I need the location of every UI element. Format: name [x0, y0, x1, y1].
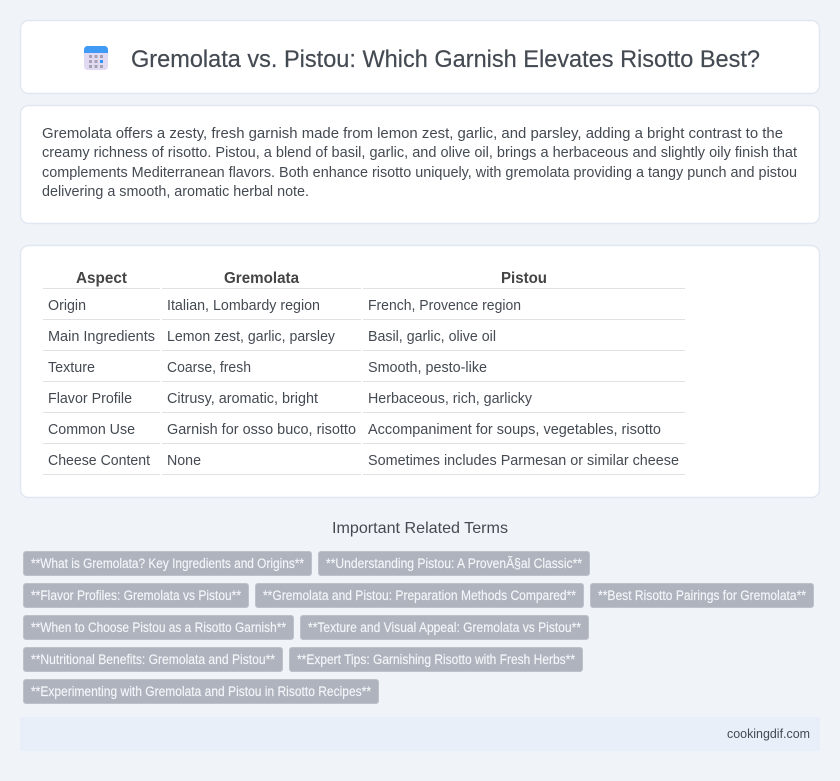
- footer bar: [20, 717, 820, 751]
- intro paragraph: delivering a smooth, aromatic herbal note.: [42, 183, 309, 200]
- row: origin: Origin: [48, 297, 86, 314]
- row: texture: Texture: [48, 359, 95, 376]
- tag: [24, 552, 312, 576]
- tag: [24, 680, 378, 704]
- tag: [24, 648, 282, 672]
- row: texture: Smooth, pesto-like: [368, 359, 487, 376]
- tag: **Nutritional Benefits: Gremolata and Pistou**: [31, 652, 276, 667]
- tag: **Gremolata and Pistou: Preparation Methods Compared**: [263, 588, 577, 603]
- row: origin: Italian, Lombardy region: [167, 297, 320, 314]
- table header: [76, 270, 547, 287]
- intro paragraph: complements Mediterranean flavors. Both enhance risotto uniquely, with gremolata providing a tangy punch and pistou: [42, 164, 797, 181]
- row: flavor profile: Herbaceous, rich, garlicky: [368, 390, 532, 407]
- related term tags: [24, 552, 814, 704]
- intro paragraph: creamy richness of risotto. Pistou, a blend of basil, garlic, and olive oil, brings a herbaceous and slightly oily finish that: [42, 144, 798, 161]
- comparison table card: [20, 246, 820, 498]
- row: main ingredients: Main Ingredients: [48, 328, 155, 345]
- row: texture: [48, 359, 487, 376]
- row: common use: Accompaniment for soups, vegetables, risotto: [368, 421, 661, 438]
- table header: Gremolata: [224, 270, 299, 287]
- row: main ingredients: Lemon zest, garlic, parsley: [167, 328, 335, 345]
- heading: important related terms: Important Related Terms: [332, 520, 508, 537]
- row: main ingredients: Basil, garlic, olive oil: [368, 328, 496, 345]
- tag: **Flavor Profiles: Gremolata vs Pistou**: [31, 588, 242, 603]
- row: origin: French, Provence region: [368, 297, 521, 314]
- row: cheese content: None: [167, 452, 201, 469]
- tag: **What is Gremolata? Key Ingredients and Origins**: [31, 556, 305, 571]
- row: cheese content: [48, 452, 679, 469]
- row: common use: Garnish for osso buco, risotto: [167, 421, 356, 438]
- tag: **Experimenting with Gremolata and Pistou in Risotto Recipes**: [31, 684, 372, 699]
- tag: [24, 584, 248, 608]
- intro paragraph: Gremolata offers a zesty, fresh garnish made from lemon zest, garlic, and parsley, adding a bright contrast to the: [42, 125, 783, 142]
- tag: **Understanding Pistou: A ProvenÃ§al Classic**: [326, 556, 583, 571]
- intro text card: [20, 106, 820, 224]
- icon: calendar: [84, 46, 108, 70]
- table header: Pistou: [501, 270, 547, 287]
- tag: [256, 584, 584, 608]
- intro paragraph: [42, 125, 798, 200]
- row: origin: [48, 297, 521, 314]
- tag: [590, 584, 814, 608]
- table header: Aspect: [76, 270, 127, 287]
- row: main ingredients: [48, 328, 496, 345]
- tag: **When to Choose Pistou as a Risotto Garnish**: [31, 620, 287, 635]
- row: flavor profile: [48, 390, 532, 407]
- tag: [318, 552, 590, 576]
- title: Gremolata vs. Pistou: Which Garnish Elevates Risotto Best?: [131, 46, 760, 73]
- footer source text: cookingdif.com: [727, 727, 810, 741]
- tag: [290, 648, 582, 672]
- tag: [24, 616, 294, 640]
- row: texture: Coarse, fresh: [167, 359, 251, 376]
- row: common use: Common Use: [48, 421, 135, 438]
- tag: [300, 616, 588, 640]
- row: flavor profile: Flavor Profile: [48, 390, 132, 407]
- row: cheese content: Cheese Content: [48, 452, 151, 469]
- tag: **Best Risotto Pairings for Gremolata**: [598, 588, 807, 603]
- row: common use: [48, 421, 661, 438]
- tag: **Expert Tips: Garnishing Risotto with Fresh Herbs**: [297, 652, 576, 667]
- header card: [20, 20, 820, 94]
- tag: **Texture and Visual Appeal: Gremolata vs Pistou**: [308, 620, 582, 635]
- row: cheese content: Sometimes includes Parmesan or similar cheese: [368, 452, 679, 469]
- row: flavor profile: Citrusy, aromatic, bright: [167, 390, 319, 407]
